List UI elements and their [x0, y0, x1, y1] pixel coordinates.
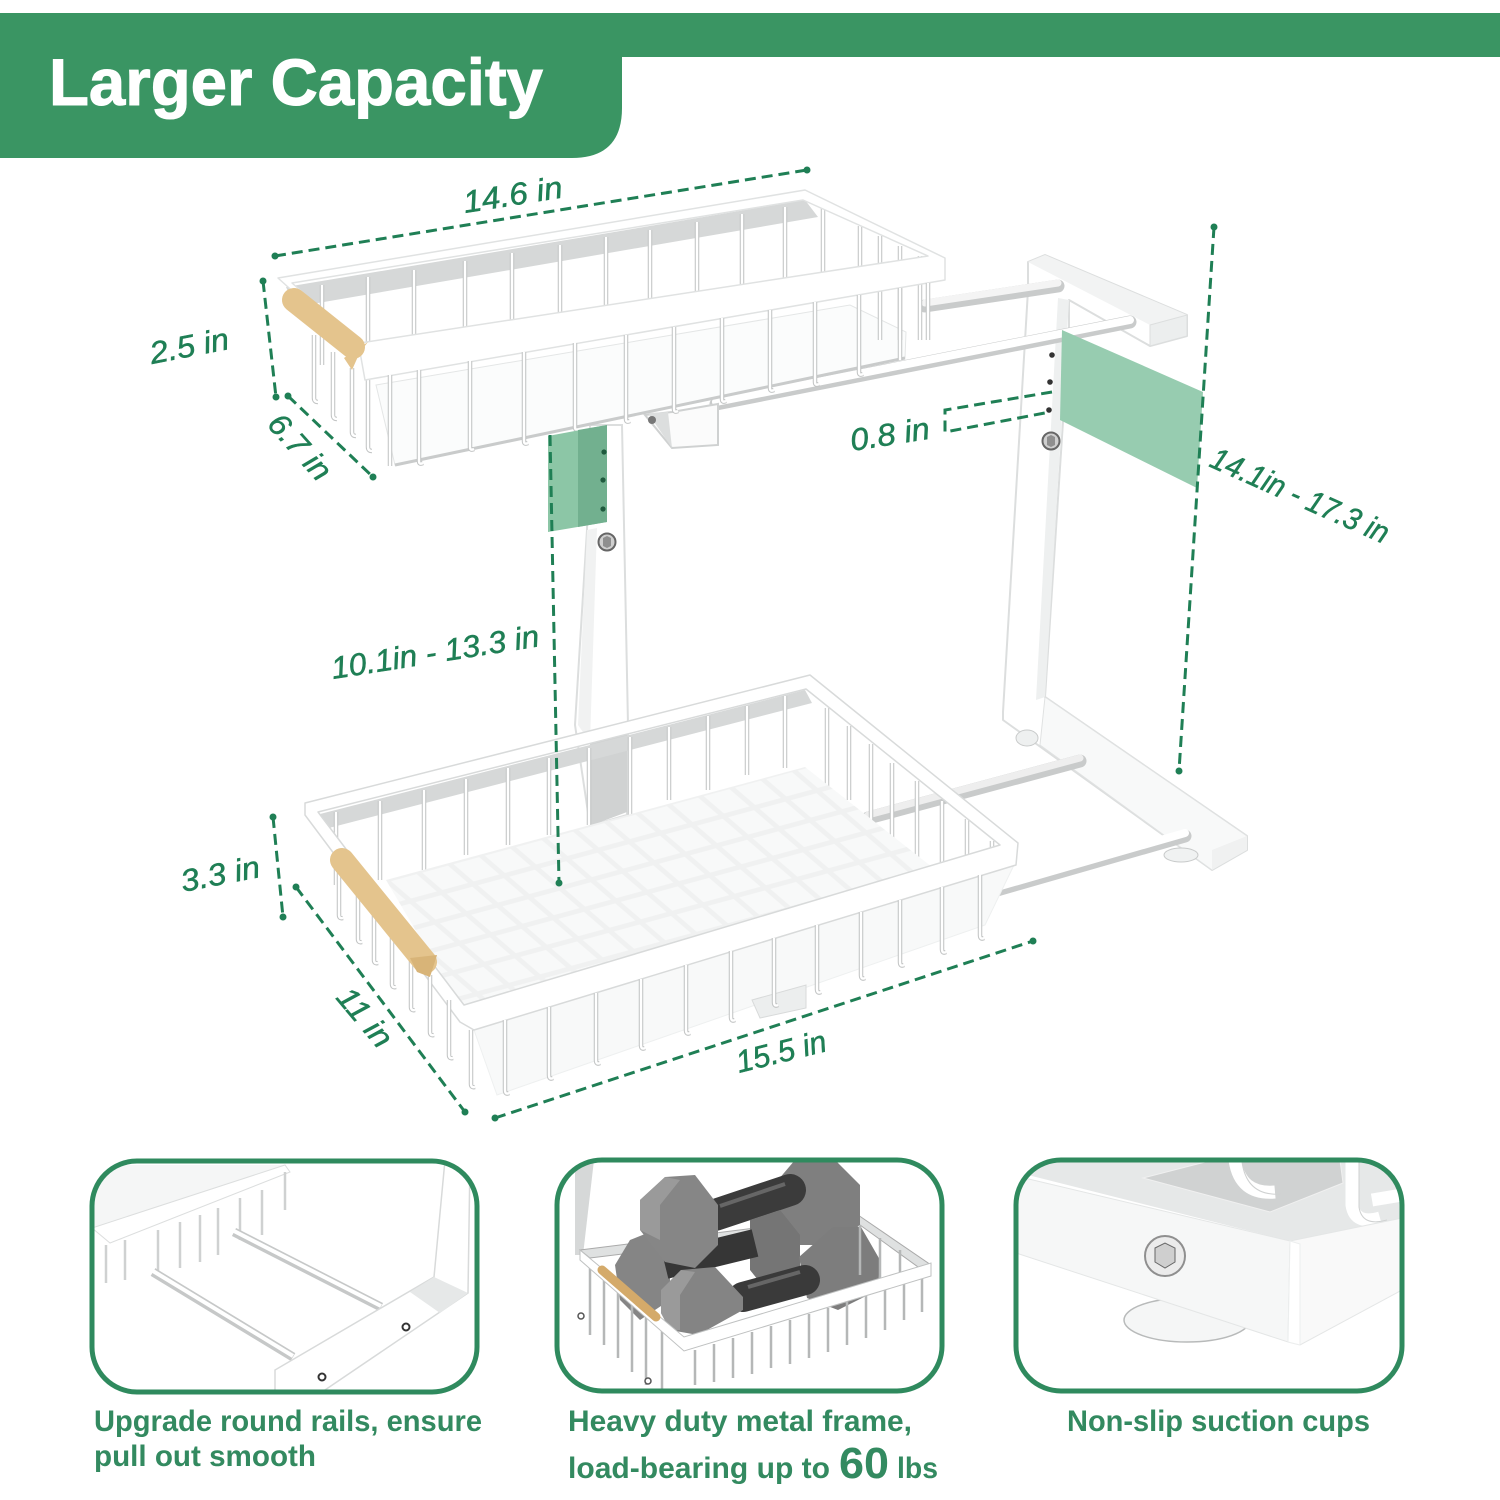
dumbbell front right head: [799, 1227, 880, 1310]
tube front face: [1016, 1176, 1290, 1342]
basket wires: [590, 1225, 922, 1392]
upright: [575, 1160, 594, 1255]
dimension: 3.3 in: 3.3 in: [178, 849, 263, 899]
dimension: 14.6 in: 14.6 in: [461, 170, 565, 220]
wood handle: [294, 300, 353, 347]
basket detail: [94, 1165, 282, 1226]
panel: round rails: [92, 1160, 477, 1392]
dumbbell middle handle: [665, 1243, 755, 1265]
dimension: 14.6 in: [272, 166, 810, 260]
left side wires: [314, 335, 372, 451]
dimension: 15.5 in: [492, 938, 1036, 1122]
dimension: 2.5 in: [146, 278, 280, 400]
panel border: [557, 1160, 942, 1391]
lower basket: [305, 675, 1018, 1095]
dimension: 3.3 in: [178, 814, 286, 920]
caption: frame: Heavy duty metal frame,: [568, 1405, 912, 1438]
green height band: right: [1042, 330, 1203, 488]
dimension: 14.1in - 17.3 in: [1176, 224, 1395, 774]
top basket: [278, 190, 945, 466]
dumbbell back left head: [640, 1175, 718, 1268]
basket floor: [376, 305, 906, 465]
dumbbell middle left head: [615, 1232, 670, 1320]
back wires: [336, 696, 992, 885]
header banner: [0, 13, 1500, 158]
adjustment holes: [601, 449, 607, 455]
dumbbell back handle: [715, 1190, 790, 1215]
caption: frame: [568, 1405, 938, 1488]
back inner band: [286, 200, 818, 307]
title: Larger Capacity: [49, 45, 543, 119]
dimension: 6.7 in: 6.7 in: [261, 406, 339, 488]
front wires: [390, 283, 928, 466]
mounting plate: [1143, 1160, 1343, 1212]
suction cup left: [1016, 730, 1038, 746]
back inner band: [320, 690, 812, 829]
dumbbell front handle: [743, 1280, 805, 1297]
dumbbell front left head: [661, 1267, 743, 1335]
caption: rails: Upgrade round rails, ensure: [94, 1405, 482, 1438]
suction cup right: [1164, 848, 1198, 862]
dumbbell middle right head: [750, 1210, 800, 1278]
tube top face: [1016, 1160, 1402, 1241]
rack frame: centre upright: [575, 425, 628, 826]
wood handle: [342, 860, 425, 962]
basket front rim: [580, 1250, 931, 1351]
adjustment holes: [1049, 352, 1055, 358]
plate with grid: [386, 767, 932, 1007]
caption: suction cups: Non-slip suction cups: [1067, 1405, 1370, 1438]
basket back rim: [580, 1215, 931, 1272]
caption: rails: pull out smooth: [94, 1440, 316, 1473]
suction cup: [1124, 1298, 1250, 1342]
rack frame: right upright and base: [1003, 255, 1247, 870]
panel: suction cups: [1016, 1160, 1402, 1391]
panel border: [1016, 1160, 1402, 1391]
caption: frame: load-bearing up to: [568, 1452, 830, 1485]
caption: rails: [94, 1405, 482, 1473]
dumbbell back right head: [778, 1160, 860, 1245]
dimension: 10.1in - 13.3 in: [329, 435, 562, 886]
dimension: 2.5 in: 2.5 in: [146, 321, 232, 371]
dimension: 10.1in - 13.3 in: 10.1in - 13.3 in: [329, 618, 542, 686]
rails: [153, 1232, 381, 1357]
dimension: 11 in: [292, 884, 468, 1116]
wood handle: [602, 1270, 656, 1317]
tube end face: [1288, 1218, 1402, 1345]
dimension: 11 in: 11 in: [330, 980, 400, 1055]
dimension: 6.7 in: [261, 392, 376, 488]
lower basket underside: [474, 865, 1014, 1095]
top basket bracket: [645, 404, 718, 448]
dimension: 0.8 in: [848, 392, 1052, 458]
bolt centre: [598, 534, 616, 550]
bolt: [1042, 432, 1060, 450]
top basket rails: [716, 283, 1130, 404]
panel border: [92, 1161, 477, 1392]
dimension: 14.1in - 17.3 in: 14.1in - 17.3 in: [1205, 440, 1395, 550]
caption: frame: 60: [839, 1439, 889, 1488]
back wires: [322, 207, 920, 365]
frame: [275, 1160, 470, 1392]
caption: frame: lbs: [897, 1452, 938, 1485]
green height band: left: [548, 425, 607, 532]
rim: [278, 190, 945, 380]
bolts: [402, 1324, 410, 1330]
dimension: 15.5 in: 15.5 in: [732, 1024, 830, 1080]
left side wires: [339, 860, 475, 1087]
dimension: 0.8 in: 0.8 in: [848, 411, 932, 458]
bolt: [1145, 1236, 1185, 1276]
panel: dumbbells in basket: [557, 1160, 942, 1392]
rim: [305, 675, 1018, 1030]
hook wire: [1235, 1160, 1402, 1220]
lower bracket: [752, 985, 806, 1018]
bolt marks: [578, 1313, 584, 1319]
lower basket rails: [868, 758, 1185, 892]
front wires: [505, 875, 984, 1094]
